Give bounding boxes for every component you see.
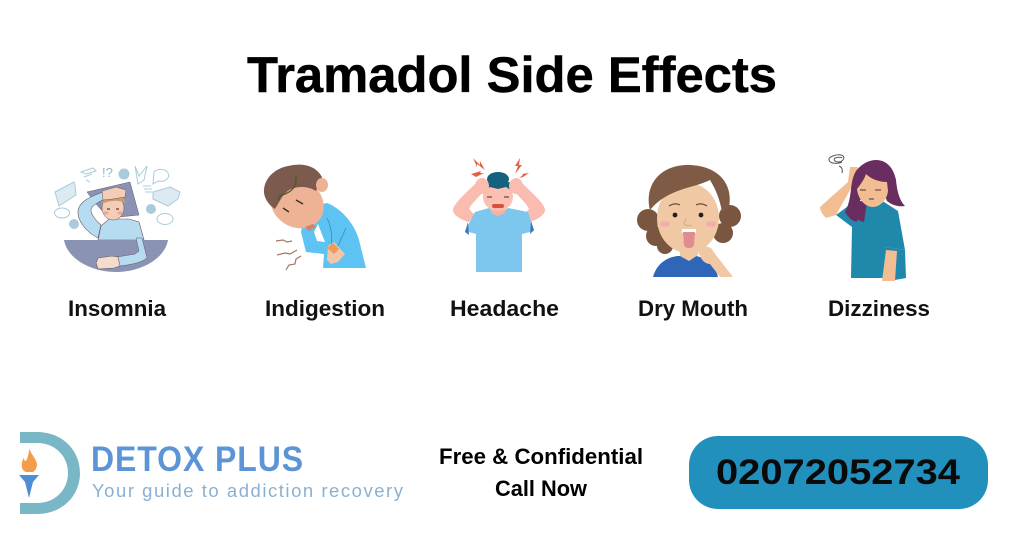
label: headache: Headache [450,296,559,321]
icon: insomnia [54,165,180,272]
label: insomnia: Insomnia [68,296,167,321]
icon: headache [453,158,545,272]
call to action text: Call Now [495,476,588,501]
icon: dizziness [820,155,906,281]
phone button [689,436,988,509]
icon: insomnia: !? [102,165,113,180]
label: dry mouth: Dry Mouth [638,296,748,321]
call to action text [439,444,643,501]
logo name: DETOX PLUS [91,440,304,479]
icon: dry mouth [637,165,741,277]
title: Tramadol Side Effects [247,47,777,103]
logo mark: D with torch [19,432,80,514]
icon: indigestion [260,165,366,270]
label: dizziness: Dizziness [828,296,930,321]
logo: Detox Plus [19,432,404,514]
label: indigestion: Indigestion [265,296,385,321]
phone button: 02072052734 [716,453,961,492]
logo tagline: Your guide to addiction recovery [92,480,404,501]
call to action text: Free & Confidential [439,444,643,469]
